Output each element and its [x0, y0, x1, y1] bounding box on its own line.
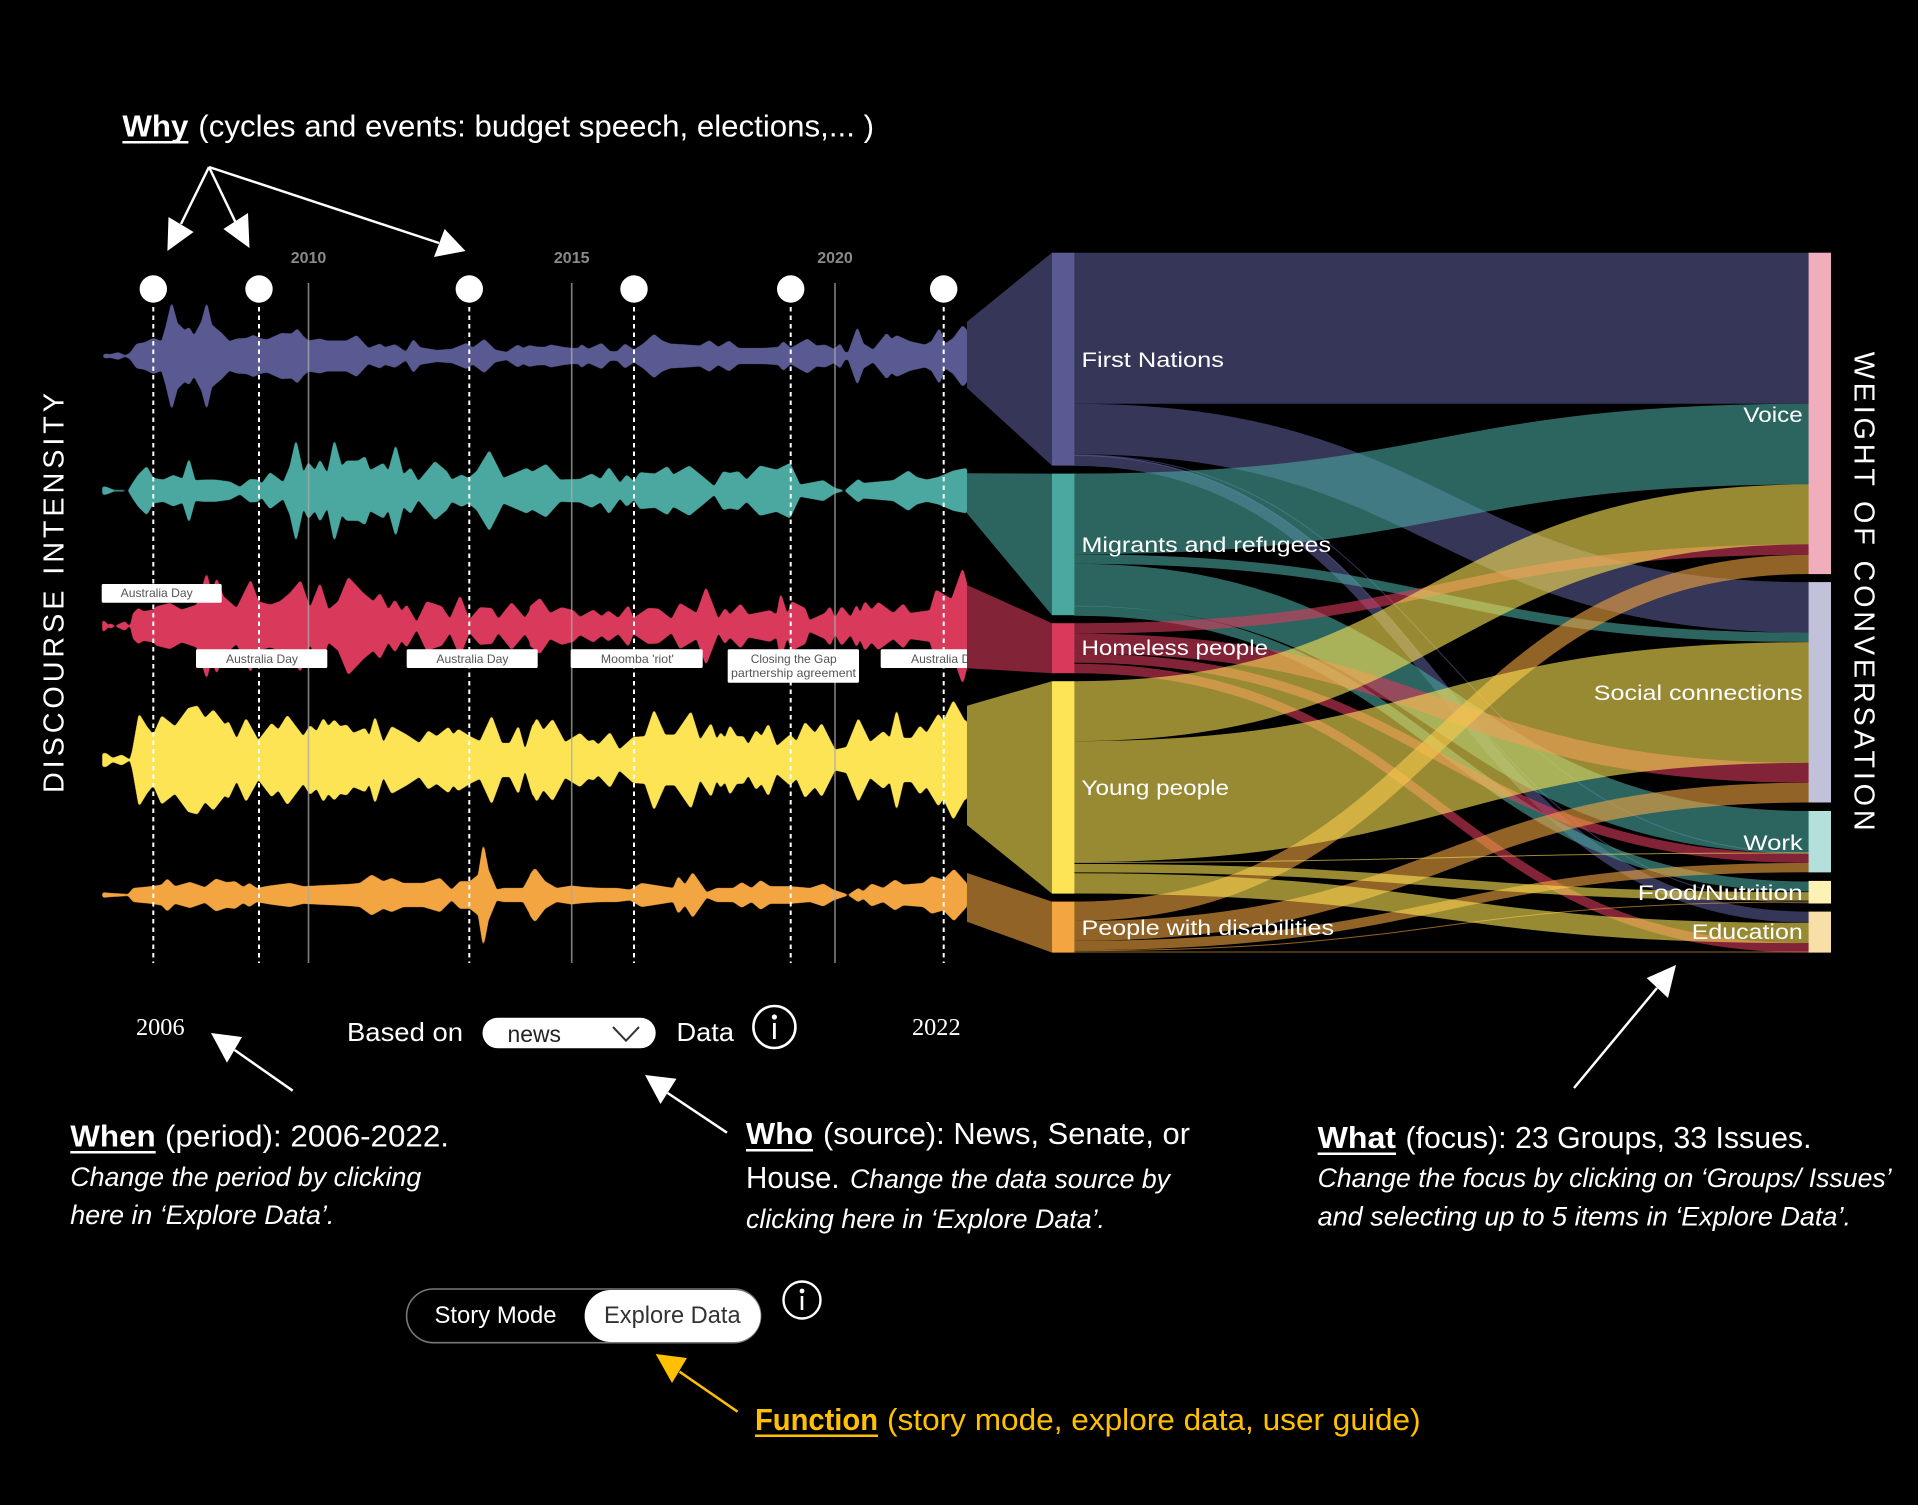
event labels: Moomba 'riot'	[601, 652, 674, 666]
streamgraph: Migrants and refugees	[103, 440, 967, 541]
streamgraph: People with disabilities	[103, 844, 967, 946]
icon: info for user guide	[784, 1282, 820, 1318]
streamgraph: Homeless people	[103, 568, 967, 684]
issue labels: Education	[1692, 920, 1803, 944]
mode toggle	[407, 1289, 761, 1343]
data source selector: news	[508, 1021, 561, 1047]
When annotation: (period): 2006-2022.	[165, 1119, 449, 1154]
year gridlines and labels: 2020	[817, 250, 853, 267]
Who annotation: Who	[746, 1116, 813, 1151]
year gridlines and labels: 2015	[554, 250, 590, 267]
issue labels: Social connections	[1594, 681, 1803, 705]
event labels	[102, 584, 983, 683]
When annotation	[70, 1119, 449, 1230]
event labels: partnership agreement	[731, 666, 857, 680]
streamgraph: First Nations	[103, 302, 967, 410]
What annotation: What	[1318, 1120, 1396, 1155]
end year: 2022	[912, 1015, 961, 1041]
Why annotation heading: Why	[122, 109, 189, 144]
mode toggle: Story Mode	[434, 1302, 556, 1329]
What annotation: (focus): 23 Groups, 33 Issues.	[1406, 1120, 1812, 1155]
year gridlines and labels	[291, 250, 853, 963]
Who annotation	[746, 1116, 1190, 1234]
event labels: Australia Day	[121, 586, 193, 600]
sankey flows from groups to issues	[1074, 328, 1809, 952]
Function annotation: Function	[755, 1402, 878, 1437]
When annotation: Change the period by clicking	[70, 1162, 421, 1192]
arrow to mode toggle	[656, 1354, 738, 1412]
issue nodes	[1809, 253, 1831, 953]
arrow to focus	[1574, 965, 1676, 1088]
What annotation	[1318, 1120, 1893, 1232]
start year: 2006	[136, 1015, 185, 1041]
Who annotation: (source): News, Senate, or	[823, 1116, 1190, 1151]
icon: info for data source	[753, 1006, 795, 1048]
group labels: First Nations	[1082, 348, 1224, 372]
issue labels: Voice	[1743, 403, 1803, 427]
event labels: Closing the Gap	[751, 652, 837, 666]
event labels: Australia Day	[226, 652, 298, 666]
axis title: discourse intensity: DISCOURSE INTENSITY	[38, 393, 70, 793]
event labels: Australia Day	[911, 652, 983, 666]
Who annotation: Change the data source by	[850, 1164, 1171, 1194]
group labels: Homeless people	[1082, 636, 1268, 660]
fan connectors from streams to group nodes	[967, 253, 1052, 953]
arrows from Why to event markers	[167, 167, 466, 257]
Function annotation: (story mode, explore data, user guide)	[887, 1402, 1421, 1437]
Who annotation: House.	[746, 1160, 840, 1195]
group labels: People with disabilities	[1082, 916, 1334, 940]
arrow to source	[645, 1075, 727, 1133]
When annotation: When	[70, 1119, 156, 1154]
issue labels: Work	[1743, 831, 1803, 855]
mode toggle: Explore Data	[604, 1302, 741, 1329]
What annotation: Change the focus by clicking on ‘Groups/ Issues’	[1318, 1163, 1893, 1193]
Why annotation heading: (cycles and events: budget speech, elections,... )	[198, 109, 874, 144]
group nodes	[1052, 253, 1074, 953]
What annotation: and selecting up to 5 items in ‘Explore Data’.	[1318, 1202, 1851, 1232]
data source selector: Data	[676, 1017, 735, 1047]
streamgraph: Young people	[103, 701, 967, 819]
group labels: Migrants and refugees	[1082, 533, 1331, 557]
issue labels	[1594, 403, 1803, 944]
issue labels: Food/Nutrition	[1638, 881, 1803, 905]
event labels: Australia Day	[436, 652, 508, 666]
data source selector	[347, 1017, 735, 1048]
event marker dashed lines and circles	[140, 275, 957, 963]
year gridlines and labels: 2010	[291, 250, 326, 267]
Who annotation: clicking here in ‘Explore Data’.	[746, 1204, 1105, 1234]
group labels	[1082, 348, 1334, 940]
arrow to period	[211, 1033, 293, 1091]
data source selector: Based on	[347, 1017, 463, 1047]
When annotation: here in ‘Explore Data’.	[70, 1200, 334, 1230]
axis title: weight of conversation: WEIGHT OF CONVERSATION	[1847, 352, 1879, 831]
group labels: Young people	[1082, 776, 1229, 800]
